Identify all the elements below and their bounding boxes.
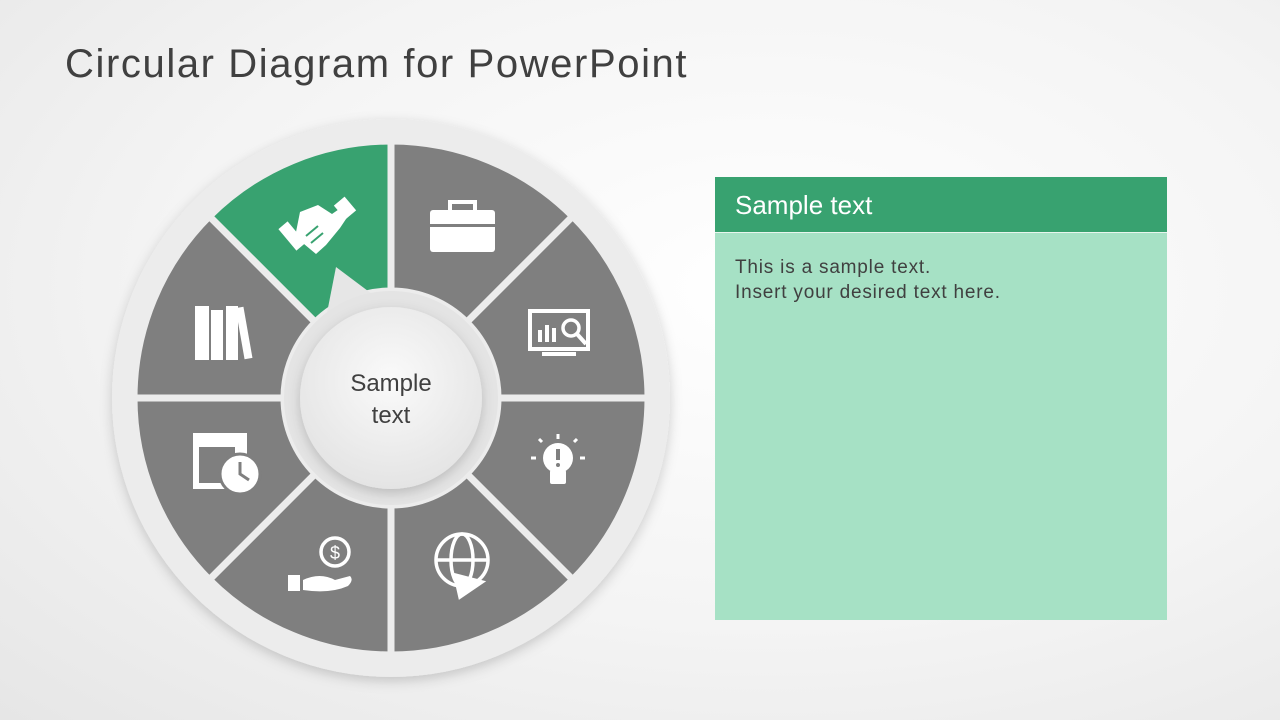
segments [134, 141, 648, 655]
title: Circular Diagram for PowerPoint [65, 42, 688, 86]
pointer [326, 267, 372, 318]
panel body text: This is a sample text. [735, 257, 931, 278]
icon: money hand: $ [330, 543, 340, 563]
segment: globe [391, 474, 573, 655]
panel body text: Insert your desired text here. [735, 282, 1001, 303]
icon: handshake [278, 197, 356, 254]
segment: bulb [467, 398, 648, 580]
icon: bulb [531, 434, 585, 484]
segment: calendar [134, 398, 315, 580]
outer ring [112, 119, 670, 677]
panel: sample text [715, 177, 1167, 620]
segment: monitor [467, 216, 648, 398]
segment: briefcase [391, 141, 573, 322]
circular diagram [107, 118, 675, 686]
icon: monitor [530, 311, 588, 356]
panel body text [735, 257, 1001, 303]
panel header [715, 177, 1167, 233]
icon: briefcase [430, 202, 495, 252]
panel header: Sample text [735, 190, 872, 220]
segment: green handshake [209, 141, 391, 322]
center circle: text [372, 402, 411, 429]
icon: globe [436, 534, 488, 597]
center circle: Sample [350, 370, 432, 397]
center circle [284, 291, 498, 505]
segment: money [209, 474, 391, 655]
icon: calendar clock [193, 433, 260, 494]
icon: money hand [288, 538, 352, 591]
segment: books [134, 216, 315, 398]
icon: books [195, 306, 252, 360]
